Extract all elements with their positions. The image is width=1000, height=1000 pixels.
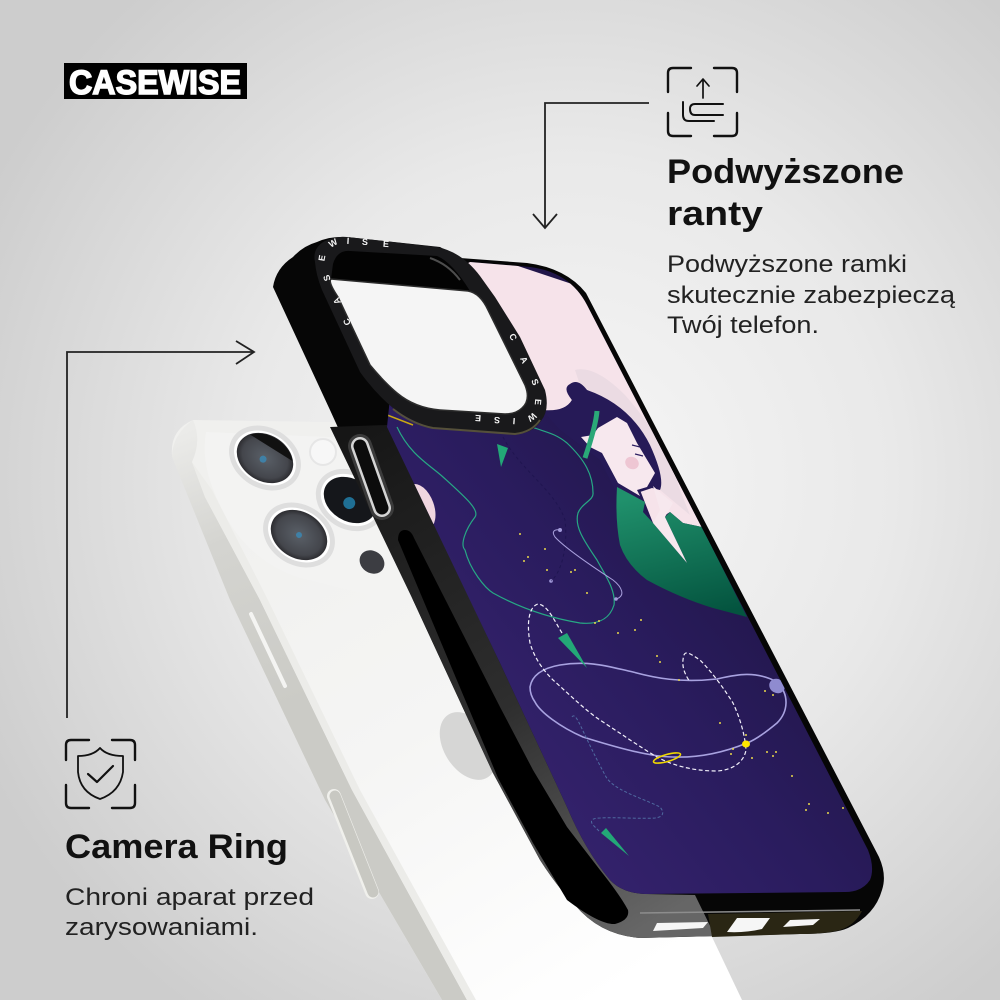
- side slot: [398, 530, 628, 924]
- text: raised edges description: Twój telefon.: [667, 312, 819, 339]
- pink shade: [575, 369, 690, 515]
- ring lettering: S: [362, 237, 368, 247]
- logo: CASEWISE: [69, 64, 241, 102]
- hair: [559, 382, 662, 522]
- heading: raised edges: [667, 153, 904, 233]
- paper darts: [497, 444, 629, 856]
- screen illustration: [387, 262, 872, 894]
- ring lettering: E: [383, 239, 389, 249]
- yellow line: [388, 414, 414, 426]
- case outer shell: [273, 237, 884, 938]
- volume button: [251, 614, 285, 686]
- ring lettering: S: [321, 274, 333, 282]
- face: [581, 417, 655, 496]
- ring lettering: S: [529, 377, 541, 387]
- icon: shield: [66, 740, 135, 808]
- ring lettering: C: [341, 316, 353, 327]
- text: raised edges description: skutecznie zabezpieczą: [667, 282, 956, 309]
- phone body: [172, 420, 742, 1000]
- small planets: [549, 528, 618, 601]
- camera window: [330, 279, 527, 414]
- mic cutout: [783, 919, 820, 927]
- ring lettering: [317, 236, 543, 426]
- green body: [616, 487, 747, 617]
- speaker cutout: [653, 922, 708, 931]
- eyes: [632, 445, 643, 456]
- pink edge bump: [414, 484, 436, 524]
- text: camera ring description: Chroni aparat przed: [65, 884, 314, 911]
- phone case: [273, 237, 884, 938]
- white phone: [172, 412, 742, 1000]
- stars: [519, 533, 844, 814]
- lens 1: [217, 412, 313, 504]
- side band light strip: [192, 462, 476, 1000]
- ring lettering: A: [518, 355, 530, 366]
- phone side band: [172, 420, 467, 1000]
- pink sky: [468, 262, 702, 527]
- ringed planet: [652, 752, 682, 764]
- white dashed orbit: [528, 604, 746, 771]
- ring lettering: I: [346, 236, 350, 246]
- ring lettering: W: [525, 410, 538, 424]
- lavender small orbit: [553, 530, 622, 599]
- ring lettering: E: [317, 254, 327, 262]
- ring lettering: A: [331, 295, 343, 306]
- green orbit: [397, 427, 614, 623]
- purple backdrop: [380, 250, 890, 910]
- blue dashed trail: [572, 716, 663, 832]
- wall highlight: [430, 258, 460, 280]
- ring band: [314, 237, 547, 434]
- ring lettering: S: [494, 415, 500, 425]
- lens 3: [304, 456, 396, 544]
- usb cutout: [727, 918, 770, 932]
- text: raised edges description: [667, 251, 956, 339]
- arrow: camera ring: [67, 341, 254, 718]
- flash: [310, 439, 336, 465]
- collar: [653, 486, 687, 563]
- yellow planet: [742, 740, 750, 748]
- side button: [334, 796, 372, 892]
- translucent side band: [330, 425, 715, 938]
- ring lettering: W: [327, 236, 340, 249]
- bottom olive strip: [708, 911, 862, 937]
- text: camera ring description: zarysowaniami.: [65, 914, 258, 941]
- green stick: [585, 411, 597, 458]
- camera plateau: [205, 432, 405, 597]
- sensor: [355, 546, 389, 578]
- moon: [769, 678, 784, 694]
- arrow: raised edges: [533, 103, 649, 228]
- ring lettering: C: [507, 332, 519, 343]
- dark dashed trail: [503, 437, 566, 581]
- lens 2: [251, 489, 347, 581]
- bottom highlight: [640, 910, 860, 913]
- logo shadow: [428, 702, 508, 790]
- text: raised edges description: Podwyższone ramki: [667, 251, 907, 278]
- big lavender orbit: [530, 663, 786, 757]
- inner black wall: [331, 251, 470, 291]
- heading: camera ring: Camera Ring: [65, 828, 288, 866]
- camera ring: [314, 236, 547, 434]
- heading: raised edges: Podwyższone: [667, 153, 904, 191]
- ring lettering: I: [512, 416, 516, 426]
- ring lettering: E: [533, 399, 543, 405]
- ring lettering: E: [475, 413, 481, 423]
- icon: raised edge: [668, 68, 737, 136]
- case button: [360, 446, 382, 508]
- blush: [625, 456, 639, 470]
- heading: raised edges: ranty: [667, 195, 763, 233]
- ring lower lip: [393, 409, 540, 434]
- text: camera ring description: [65, 884, 314, 941]
